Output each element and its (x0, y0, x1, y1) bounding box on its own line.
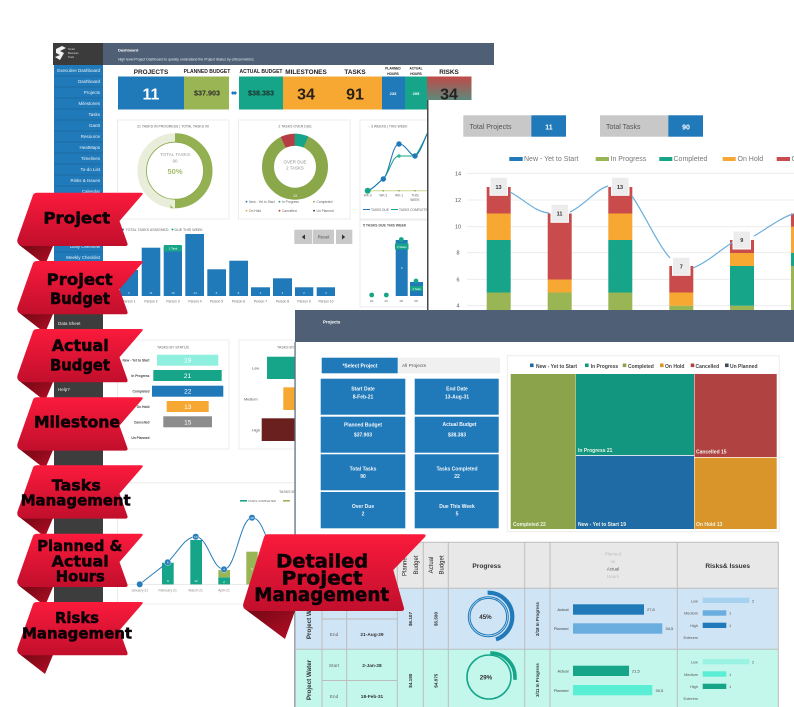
chart: tasks by status: 15 (184, 419, 192, 426)
risks bars: Extreem (684, 635, 698, 640)
KPI labels: MILESTONES (285, 69, 327, 76)
stacked bar chart (455, 171, 794, 310)
table header: Budget (414, 555, 420, 575)
planned vs actual hours (554, 604, 674, 634)
chart legend (509, 156, 794, 163)
logo (53, 43, 103, 65)
ribbon: Milestone (17, 397, 143, 469)
value labels: 7 (680, 265, 683, 271)
chart: tasks by status: Un Planned (131, 436, 150, 440)
project metric cards: Actual Budget (443, 422, 477, 428)
risks bars: 1 (729, 684, 731, 689)
ribbon: Risks Management: Management (22, 624, 133, 642)
project metric cards: $37.903 (354, 432, 372, 438)
chart: tasks by status: Completed (132, 390, 150, 394)
chart: tasks by status: On Hold (137, 405, 150, 409)
chart: tasks assigned by person: Person 2 (144, 300, 158, 304)
chart: weekly tasks line: - 3 WEEKS | THIS WEEK (369, 124, 408, 128)
stacked bar chart: 8 (456, 251, 460, 257)
KPI labels: HOURS (410, 72, 422, 76)
chart: tasks assigned by person: Person 8 (276, 300, 289, 304)
chart legend: New - Yet to Start (524, 156, 579, 163)
chart: tasks by month: TASKS COMPLETED (248, 499, 276, 503)
sidebar navigation: Data Sheet (58, 321, 81, 326)
project metric cards: Due This Week (439, 504, 475, 510)
chart: weekly tasks line (360, 120, 431, 219)
panel: total projects stacked chart (427, 100, 794, 310)
bar 3 (608, 187, 632, 310)
logo: Tools (68, 55, 75, 59)
stacked bar chart: 12 (455, 198, 461, 204)
ribbon: Detailed Project Management: Project (282, 567, 362, 589)
KPI: total tasks (600, 115, 703, 137)
risks bars: Medium (684, 672, 698, 677)
ribbon: Detailed Project Management: Detailed (276, 550, 368, 572)
chart: tasks assigned by person: Person 6 (232, 300, 245, 304)
chart: tasks assigned by person (120, 228, 335, 304)
risks bars: Medium (684, 610, 698, 616)
bar 2 (548, 214, 572, 310)
bar 1 (487, 187, 511, 310)
sidebar navigation: Milestones (78, 101, 101, 106)
ribbon: Project (17, 193, 143, 265)
treemap: On Hold 13 (696, 522, 723, 528)
stacked bar chart: 10 (455, 225, 461, 231)
project metric cards: $38.383 (448, 432, 466, 438)
stacked bar chart: 14 (455, 171, 461, 177)
chart: weekly tasks line: THIS (411, 194, 419, 198)
chart: tasks over due donut: Completed (316, 200, 333, 204)
ribbon: Planned and Actual Hours (17, 534, 143, 606)
sidebar navigation: Tasks (88, 112, 101, 117)
ribbon: Actual Budget: Actual (52, 336, 109, 355)
table header: Progress (472, 563, 501, 570)
logo: Smart (68, 47, 75, 51)
chart: tasks by status: 22 (184, 389, 192, 396)
chart: tasks assigned by person: DUE THIS WEEK (174, 228, 203, 232)
chart: tasks assigned by person: Person 9 (297, 300, 311, 304)
risks bars (684, 598, 754, 640)
KPI blocks: 34 (297, 86, 315, 104)
table row: project 1: $5.590 (434, 612, 438, 626)
chart: tasks over due donut: OVER DUE (284, 160, 307, 164)
sidebar navigation: HeatMaps (79, 145, 101, 150)
chart: tasks by month: April-21 (218, 588, 230, 592)
planned vs actual hours: 27,5 (647, 607, 656, 612)
chart: tasks by month: 2 (223, 580, 225, 584)
sidebar navigation: Daily Overview (70, 244, 101, 249)
table row: project 2 (296, 649, 778, 707)
treemap legend: Completed (628, 364, 654, 370)
chart legend: On Hold (738, 156, 763, 163)
table header: Actual (607, 566, 619, 572)
table row: project 2: Start (329, 663, 340, 669)
KPI labels: PLANNED (385, 66, 401, 70)
KPI labels: PLANNED BUDGET (184, 69, 230, 75)
risks bars: Extreem (684, 696, 698, 701)
table row: project 2: Project Water (306, 659, 313, 700)
sidebar navigation: Dashboard (78, 79, 100, 84)
chart: tasks assigned by person: Person 7 (254, 300, 267, 304)
chart: tasks by status: 19 (184, 358, 192, 365)
treemap: In Progress 21 (578, 448, 613, 454)
chart: tasks over due donut: New - Yet to Start (249, 200, 275, 204)
ribbon: Planned and Actual Hours: Planned & (37, 537, 122, 555)
risks bars: High (690, 684, 698, 689)
table header: Actual (429, 557, 435, 573)
pagination buttons: Reset (318, 234, 330, 240)
chart: weekly tasks line: TASKS COMPLETED (399, 208, 431, 212)
chart: weekly tasks line: TASKS DUE (371, 208, 389, 212)
planned vs actual hours (554, 666, 664, 695)
chart: tasks by priority: TASKS BY (277, 346, 295, 350)
table header (296, 542, 778, 588)
treemap: New - Yet to Start 19 (578, 522, 626, 528)
ribbon: Milestone: Milestone (34, 412, 120, 431)
chart legend: Completed (674, 156, 707, 163)
risks bars: 1 (729, 623, 731, 628)
ribbon: Actual Budget: Budget (50, 356, 110, 375)
value labels: 13 (495, 185, 502, 191)
chart: tasks due this week: 1 Task (412, 287, 421, 291)
chart: tasks due this week: 4 Tasks (397, 245, 407, 249)
ribbon: Tasks Management (17, 465, 143, 537)
pagination buttons (294, 230, 352, 244)
project metric cards: 13-Aug-31 (445, 394, 469, 400)
chart: tasks assigned by person: 14 (193, 291, 197, 295)
chart: tasks by status: In Progress (131, 374, 150, 378)
bar 6 (791, 214, 794, 310)
chart: tasks assigned by person: Person 4 (188, 300, 202, 304)
table header: Planned (605, 552, 622, 556)
project metric cards: 90 (360, 474, 366, 480)
table row: project 1: 2/18 In Progress (535, 601, 540, 636)
stacked bar chart: 4 (456, 304, 460, 310)
stacked bar chart: 6 (456, 277, 460, 283)
table header: Risks& Issues (705, 563, 750, 570)
dashboard header bar (103, 43, 494, 65)
chart: tasks by priority: Medium (244, 398, 258, 402)
chart: tasks due this week (360, 220, 430, 307)
chart: tasks by month (118, 483, 300, 604)
sidebar navigation: Calendar (82, 189, 100, 194)
table header: vs (611, 559, 616, 564)
progress ring 29%: 29% (480, 674, 493, 682)
KPI labels: RISKS (439, 69, 460, 76)
sidebar navigation: To-do List (80, 167, 101, 172)
chart: weekly tasks line: WK-3 (364, 194, 372, 198)
chart: tasks assigned by person: 4 (282, 291, 284, 295)
chart: tasks by month: February-21 (158, 588, 177, 592)
projects header bar (295, 310, 794, 342)
chart: tasks by status: 13 (184, 404, 192, 411)
KPI: total tasks: Total Tasks (606, 124, 641, 131)
risks bars: 1 (729, 610, 731, 616)
chart: tasks by month: 6 (167, 560, 169, 564)
KPI: total projects: 11 (545, 124, 553, 131)
planned vs actual hours: Planned (554, 688, 568, 693)
ribbon: Planned and Actual Hours: Hours (56, 568, 105, 586)
dashboard header bar: High level Project Dashboard to quickly understand the Project Status by critical metrics (118, 58, 254, 62)
projects header bar: Projects (323, 320, 341, 324)
ribbon: Project Budget: Project (47, 270, 113, 289)
table row: project 2: 2-Jan-28 (362, 663, 382, 669)
chart: tasks by month: 12 (194, 579, 198, 583)
sidebar navigation: Gantt (89, 123, 101, 128)
chart: tasks by status: 21 (184, 373, 191, 380)
chart: tasks over due donut: Un Planned (316, 209, 334, 213)
KPI labels (134, 66, 460, 76)
risks bars (684, 659, 754, 701)
KPI blocks: 91 (346, 86, 364, 104)
treemap legend (530, 364, 758, 370)
treemap legend: New - Yet to Start (536, 364, 577, 370)
ribbon: Risks Management (17, 602, 143, 674)
project metric cards: 22 (454, 474, 460, 480)
progress ring 45%: 45% (479, 614, 492, 621)
chart: tasks by month: 9 (251, 567, 253, 571)
project metric cards: 2 (362, 512, 365, 518)
bar 5 (730, 240, 754, 310)
planned vs actual hours: Actual (557, 607, 569, 612)
chart: tasks in progress donut (118, 120, 229, 219)
chart: tasks in progress donut: TOTAL TASKS (160, 152, 190, 157)
ribbon: Planned and Actual Hours: Actual (52, 552, 109, 570)
chart: weekly tasks line: WK-2 (379, 194, 388, 198)
ribbon: Detailed Project Management (243, 534, 426, 639)
table header: Budget (440, 555, 446, 575)
chart: tasks assigned by person: Person 5 (210, 300, 223, 304)
chart: tasks by month: March-21 (189, 588, 203, 592)
chart: tasks by status: Cancelled (134, 420, 150, 424)
project metric cards: End Date (446, 386, 468, 392)
ribbon: Tasks Management: Management (21, 491, 131, 509)
value labels (490, 177, 750, 275)
KPI blocks: 34 (440, 86, 458, 103)
chart legend: In Progress (610, 156, 647, 163)
chart: tasks assigned by person: 2 (260, 291, 262, 295)
risks bars: 2 (752, 660, 754, 664)
chart: tasks assigned by person: 2 (325, 291, 327, 295)
chart: tasks assigned by person: 6 (216, 291, 218, 295)
chart: tasks by status: New - Yet to Start (122, 358, 150, 362)
chart: tasks in progress donut: 50% (167, 167, 183, 176)
KPI blocks (118, 76, 472, 110)
sidebar navigation: Executive Dashboard (57, 68, 100, 73)
table row: project 2: $4.875 (434, 673, 438, 688)
chart: weekly tasks line: WK-1 (395, 194, 403, 198)
value labels: 9 (740, 238, 743, 244)
chart: tasks by month: January-21 (131, 588, 148, 592)
sidebar navigation: Help? (58, 387, 70, 392)
panel: projects detail (294, 310, 794, 707)
progress ring 29% (467, 653, 515, 701)
chart: tasks assigned by person: 6 (128, 291, 130, 295)
table row: project 1: Project Water (306, 598, 313, 639)
chart: tasks assigned by person: Person 1 (122, 300, 136, 304)
KPI: total projects: Total Projects (470, 124, 512, 131)
table header: Planned (402, 554, 408, 576)
risks bars: Low (691, 660, 698, 664)
KPI blocks: $37.903 (194, 88, 220, 98)
project selector: *Select Project (342, 364, 378, 370)
ribbon: Detailed Project Management: Management (254, 584, 389, 606)
table row: project 2: 3/11 In Progress (535, 663, 540, 697)
treemap (507, 356, 779, 532)
KPI labels: HOURS (387, 72, 399, 76)
project table (296, 542, 778, 707)
planned vs actual hours: Actual (557, 668, 569, 674)
chart: tasks by status (118, 340, 229, 449)
chart: tasks over due donut (238, 120, 350, 219)
project selector (322, 358, 500, 373)
chart: tasks assigned by person: 8 (238, 291, 240, 295)
table row: project 1: $6.107 (408, 612, 413, 626)
chart: tasks by priority (239, 340, 299, 449)
sidebar navigation (54, 65, 103, 605)
ribbon: Project: Project (43, 208, 110, 227)
trend line (510, 186, 793, 268)
table header: Hours (607, 574, 620, 579)
project metric cards: Start Date (351, 386, 375, 392)
chart: tasks assigned by person: TOTAL TASKS ASSIGNED (126, 228, 169, 232)
project metric cards: Total Tasks (350, 466, 377, 472)
chart: weekly tasks line: WEEK (410, 198, 421, 202)
project selector: All Projects (402, 363, 427, 369)
ribbon: Project Budget: Budget (50, 289, 110, 308)
treemap legend: On Hold (665, 364, 684, 370)
ribbon: Project Budget (17, 261, 143, 333)
chart: tasks assigned by person: 2 (303, 291, 305, 295)
chart: tasks over due donut: On Hold (249, 209, 261, 213)
risks bars: High (690, 623, 698, 628)
chart: tasks by month: 13 (194, 535, 198, 539)
table row: project 1: End (330, 632, 339, 638)
risks bars: Low (691, 598, 698, 604)
chart: tasks by status: TASKS BY STATUS (157, 346, 190, 350)
chart: tasks due this week: 00 (370, 299, 374, 303)
chart: tasks by priority: Low (252, 366, 259, 370)
chart: tasks assigned by person: 11 (149, 291, 153, 295)
treemap legend: In Progress (591, 364, 618, 370)
project metric cards: 8-Feb-21 (353, 394, 373, 400)
KPI blocks: 233 (390, 91, 397, 96)
ribbon: Risks Management: Risks (55, 609, 99, 627)
sidebar navigation: Projects (84, 90, 101, 95)
project metric cards: Over Due (352, 504, 374, 510)
chart: tasks by month: 4 (223, 568, 225, 572)
planned vs actual hours: Planned (554, 626, 568, 631)
table row: project 1: 21-Aug-29 (360, 632, 384, 638)
sidebar navigation: Resource (81, 134, 100, 139)
value labels: 11 (557, 212, 562, 218)
table row: project 2: $4.180 (408, 673, 413, 688)
KPI blocks: 205 (413, 91, 420, 96)
chart: tasks in progress donut: 21 TASKS IN PROGRESS | TOTAL TASKS 90 (137, 124, 209, 128)
chart: tasks by priority: High (252, 428, 260, 432)
chart: tasks due this week: 00 (385, 299, 388, 303)
KPI: total tasks: 90 (682, 124, 690, 131)
bar 4 (669, 266, 693, 310)
chart: tasks assigned by person: Person 10 (318, 300, 334, 304)
sidebar navigation: Weekly Checklist (66, 255, 101, 260)
value labels: 13 (617, 185, 623, 191)
table row: project 2: 18-Feb-31 (361, 694, 384, 700)
planned vs actual hours: 34,5 (666, 626, 674, 631)
KPI blocks: $38.383 (248, 88, 274, 98)
chart: tasks by month: TASKS BY (279, 490, 297, 494)
KPI labels: TASKS (344, 69, 366, 76)
KPI: total projects (463, 115, 566, 137)
sidebar navigation: Risks & Issues (70, 178, 101, 183)
project metric cards: 5 (456, 512, 459, 518)
chart: tasks assigned by person: Person 3 (166, 300, 180, 304)
KPI labels: ACTUAL BUDGET (240, 69, 282, 75)
logo: Business (68, 51, 79, 55)
chart: tasks due this week: 08 (400, 299, 403, 303)
sidebar navigation: Timelines (81, 156, 101, 161)
ribbon: Tasks Management: Tasks (52, 476, 101, 494)
chart: tasks assigned by person: 1 Task (169, 246, 178, 250)
chart: tasks over due donut: 13 (293, 194, 297, 198)
chart: tasks due this week: 5 TASKS DUE THIS WEEK (363, 224, 407, 228)
chart: tasks over due donut: 2 TASKS OVER DUE (278, 124, 312, 128)
chart: tasks due this week: 08 (414, 299, 418, 303)
chart: tasks over due donut: 2 TASKS (286, 166, 304, 170)
project metric cards: Planned Budget (344, 422, 382, 428)
treemap: Cancelled 15 (696, 450, 727, 456)
dashboard header bar: Dashboard (118, 48, 139, 52)
ribbon: Actual Budget (17, 329, 143, 401)
treemap legend: Un Planned (730, 364, 758, 370)
treemap legend: Cancelled (696, 364, 719, 370)
chart: tasks over due donut: In Progress (282, 200, 299, 204)
chart: tasks due this week: 4 (401, 266, 403, 270)
chart: tasks over due donut: Cancelled (282, 209, 297, 213)
table row: project 1 (296, 588, 778, 649)
table row: project 2: End (330, 694, 339, 700)
treemap: Completed 22 (513, 522, 546, 528)
risks bars: 2 (752, 598, 754, 604)
chart: tasks in progress donut: 90 (172, 158, 178, 164)
chart: tasks by month: 18 (250, 516, 254, 520)
panel: main dashboard window (53, 43, 494, 610)
project metric cards: Tasks Completed (436, 466, 478, 472)
chart: tasks assigned by person: 16 (171, 291, 175, 295)
project metric cards (321, 379, 499, 528)
planned vs actual hours: 30,5 (656, 688, 664, 693)
chart: tasks by month: 6 (167, 579, 169, 583)
KPI labels: ACTUAL (409, 66, 423, 70)
planned vs actual hours: 21,5 (632, 668, 641, 674)
KPI blocks: 11 (143, 86, 160, 104)
KPI labels: PROJECTS (134, 69, 169, 76)
progress ring 45% (464, 593, 512, 641)
risks bars: 1 (729, 672, 731, 677)
